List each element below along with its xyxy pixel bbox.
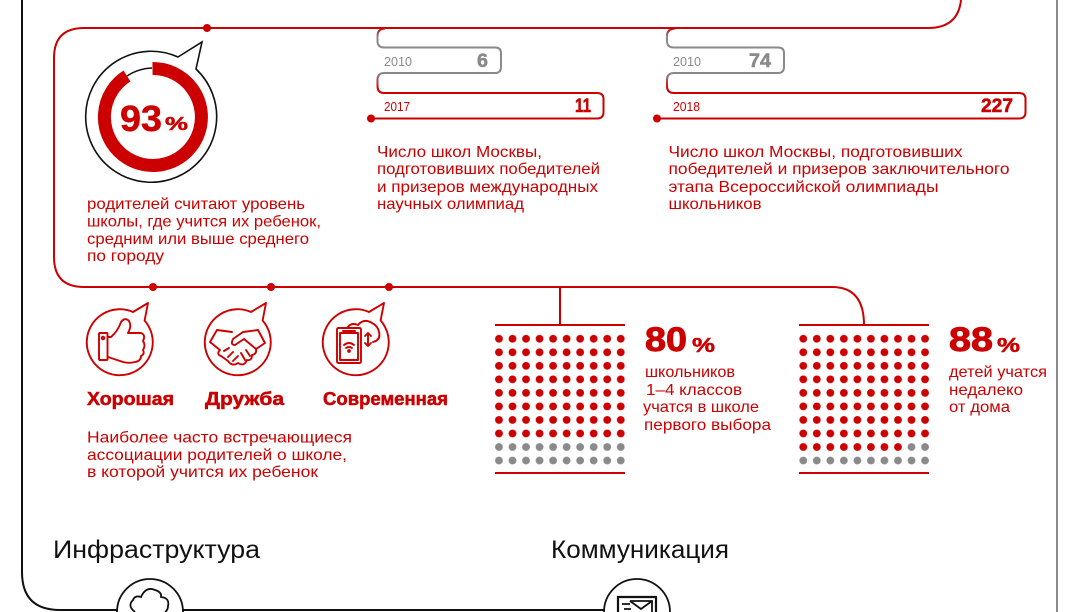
label: friendship: Дружба (205, 389, 285, 409)
icon: envelope (604, 579, 670, 612)
timeline connector (54, 0, 961, 325)
dot chart: 88 of 100 (796, 325, 932, 473)
bar chart: 2010 vs 2018: 2018 (673, 99, 700, 114)
percent sign: % (997, 335, 1020, 357)
close to home caption: детей учатся (949, 364, 1047, 381)
all-russian olympiad caption: этапа Всероссийской олимпиады (668, 179, 938, 196)
heading: communication: Коммуникация (551, 536, 729, 564)
associations caption: Наиболее часто встречающиеся (87, 430, 352, 446)
bar chart: 2010 vs 2017 (367, 28, 604, 122)
icon: thumbs up (87, 303, 153, 375)
close to home caption: недалеко (949, 382, 1023, 399)
parents rating caption: школы, где учится их ребенок, (87, 214, 321, 230)
parents rating caption: по городу (87, 248, 164, 265)
bar chart: 2010 vs 2018: 227 (981, 96, 1013, 117)
bar chart: 2010 vs 2018 (653, 28, 1026, 122)
all-russian olympiad caption: победителей и призеров заключительного (668, 161, 1010, 178)
first choice caption: школьников (645, 364, 735, 381)
all-russian olympiad caption: школьников (668, 196, 762, 213)
panel: parents rating 93% (86, 42, 321, 265)
first choice caption: учатся в школе (643, 399, 759, 416)
bar chart: 2010 vs 2017: 6 (477, 51, 488, 72)
88 percent value: 88 (949, 321, 993, 359)
parents rating caption: родителей считают уровень (87, 196, 305, 213)
olympiad caption: подготовивших победителей (377, 161, 600, 178)
associations caption: в которой учится их ребенок (87, 464, 319, 481)
parents rating caption (87, 196, 321, 265)
first choice caption (643, 364, 771, 434)
olympiad caption: и призеров международных (377, 179, 598, 196)
close to home caption: от дома (949, 399, 1010, 416)
panel: 80 percent first choice (492, 321, 771, 473)
olympiad caption (377, 144, 600, 213)
panel: school associations (87, 303, 448, 481)
associations caption: ассоциации родителей о школе, (87, 447, 347, 464)
bar chart: 2010 vs 2018: 74 (749, 51, 771, 72)
dot chart: 80 of 100 (492, 325, 628, 473)
heading: infrastructure: Инфраструктура (53, 536, 260, 564)
parents rating caption: средним или выше среднего (87, 231, 309, 248)
panel: international olympiads (367, 28, 604, 213)
icon: cloud (117, 579, 183, 612)
label: modern: Современная (323, 389, 448, 409)
panel: all-russian olympiad (653, 28, 1026, 213)
icon: modern tablet and cloud (323, 303, 389, 375)
all-russian olympiad caption (668, 144, 1010, 213)
first choice caption: первого выбора (644, 417, 771, 434)
bar chart: 2010 vs 2017: 11 (575, 96, 591, 117)
olympiad caption: Число школ Москвы, (377, 144, 542, 161)
bar chart: 2010 vs 2017: 2010 (384, 54, 412, 69)
93 percent value: 93 (120, 98, 162, 139)
associations caption (87, 430, 352, 481)
olympiad caption: научных олимпиад (377, 196, 525, 213)
close to home caption (949, 364, 1047, 416)
panel: 88 percent close to home (796, 321, 1047, 473)
first choice caption: 1–4 классов (646, 382, 742, 399)
bar chart: 2010 vs 2017: 2017 (384, 99, 410, 114)
percent sign: % (692, 335, 715, 357)
percent sign: % (165, 114, 188, 134)
icon: speech bubble with ring chart (86, 42, 217, 182)
label: good: Хорошая (87, 389, 174, 409)
icon: handshake (205, 303, 271, 375)
bar chart: 2010 vs 2018: 2010 (673, 54, 701, 69)
all-russian olympiad caption: Число школ Москвы, подготовивших (668, 144, 962, 161)
80 percent value: 80 (645, 321, 687, 359)
